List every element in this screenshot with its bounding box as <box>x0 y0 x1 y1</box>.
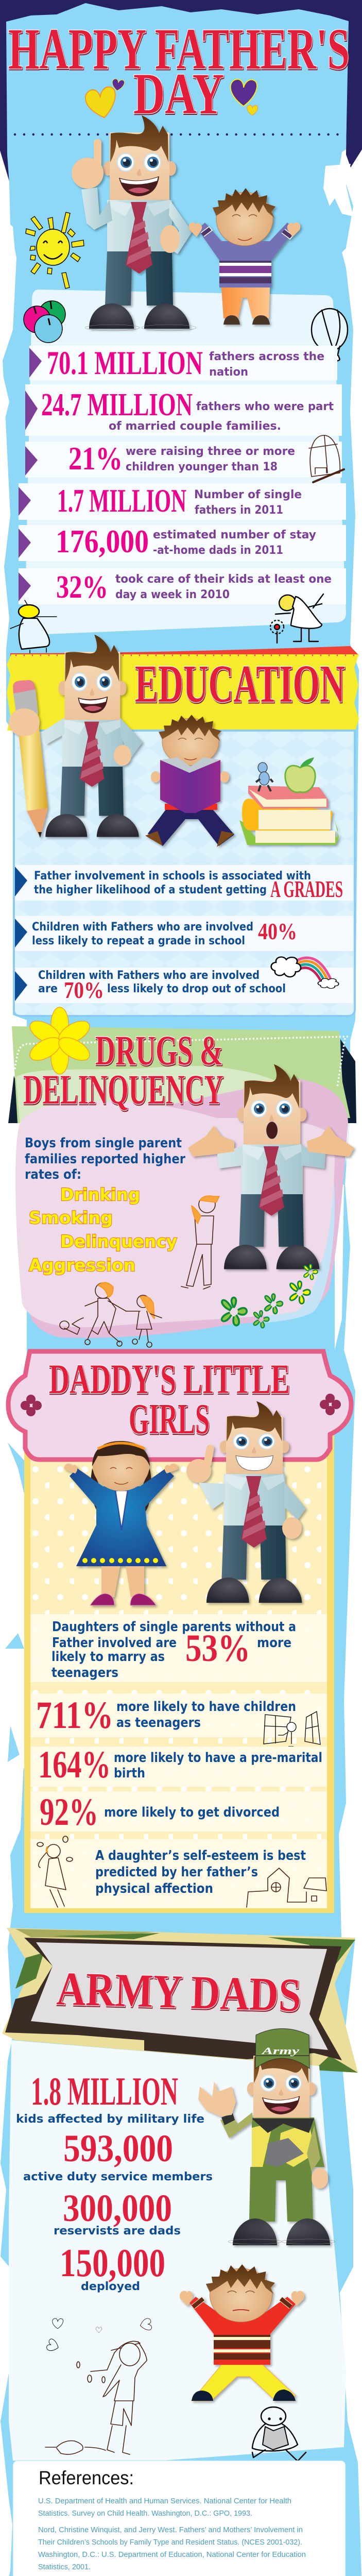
fact: 53 percent marry as teenagers: likely to marry as <box>51 1649 165 1665</box>
fact: 53 percent marry as teenagers: 53% <box>185 1627 250 1670</box>
stat row: 21 percent: 21% <box>68 440 123 477</box>
fact: 164 percent: more likely to have a pre-marital <box>114 1750 322 1766</box>
fact: 711 percent <box>30 1693 327 1737</box>
stat row: 21 percent <box>25 440 342 478</box>
stat row: 21 percent: children younger than 18 <box>126 461 278 473</box>
stat row: 24.7 million: 24.7 MILLION <box>41 387 193 422</box>
icon: yellow flower <box>26 1007 93 1074</box>
reference list: Nord, Christine Winquist, and Jerry West. Fathers’ and Mothers’ Involvement in <box>38 2526 303 2534</box>
panel: references <box>13 2461 346 2576</box>
character: father body <box>72 139 192 329</box>
icon: balls <box>24 301 65 343</box>
stat: 593,000 <box>23 2127 213 2183</box>
stat row: 21 percent: were raising three or more <box>126 445 295 458</box>
stat: 150,000: 150,000 <box>60 2241 165 2285</box>
reference list: Their Children’s Schools by Family Type and Resident Status. (NCES 2001-032). <box>38 2538 302 2547</box>
stat: 300,000: reservists are dads <box>54 2225 181 2238</box>
stat: 300,000: 300,000 <box>63 2187 172 2230</box>
doodle: children roller skating with cat <box>60 1282 162 1347</box>
panel: education <box>14 731 355 1016</box>
character: father thumbs up <box>186 1401 306 1603</box>
floor ellipses under soldier <box>228 2239 335 2244</box>
heading: army dads: ARMY DADS <box>56 1962 302 2022</box>
fact: 164 percent: birth <box>114 1766 145 1781</box>
fact: 92 percent <box>30 1791 327 1834</box>
list: higher rates: Delinquency <box>60 1231 177 1251</box>
education fact: 70 percent <box>15 968 353 1003</box>
fact: 711 percent: as teenagers <box>116 1715 201 1731</box>
reference list: Washington, D.C.: U.S. Department of Education, National Center for Education <box>38 2550 306 2559</box>
stat: 1.8 million: 1.8 MILLION <box>31 2069 178 2113</box>
stat row: 32 percent: day a week in 2010 <box>115 588 230 601</box>
fact: 53 percent marry as teenagers: Father involved are <box>52 1635 177 1651</box>
list: higher rates <box>29 1184 177 1275</box>
title: Day: DAY <box>133 62 224 126</box>
stat: 150,000: deployed <box>81 2280 140 2293</box>
text: boys from single parent families: families reported higher <box>25 1151 185 1167</box>
stat row: 176,000: -at-home dads in 2011 <box>153 544 283 557</box>
stat row: 70.1 million: nation <box>209 366 248 379</box>
icon: sun <box>26 212 84 289</box>
stat row: 176,000: estimated number of stay <box>153 529 316 541</box>
character: son reading <box>145 715 234 847</box>
stat row: 32 percent: took care of their kids at least one <box>115 573 332 586</box>
fact: self-esteem: A daughter’s self-esteem is best <box>95 1848 306 1863</box>
fact: 53 percent marry as teenagers <box>30 1614 327 1682</box>
character: daughter <box>64 1441 178 1605</box>
camouflage ribbon <box>2 1928 358 2073</box>
panel: drugs and delinquency <box>8 1026 356 1338</box>
stat row: 1.7 million: 1.7 MILLION <box>57 483 186 519</box>
icon: green apple <box>285 757 315 792</box>
character: father with pencil <box>9 635 143 838</box>
stat row: 1.7 million: Number of single <box>194 488 302 501</box>
grunge navy frame <box>0 0 362 181</box>
list: higher rates: Aggression <box>29 1255 135 1275</box>
education fact: 40 percent: Children with Fathers who are involved <box>32 921 253 934</box>
stat row: 24.7 million <box>25 384 342 436</box>
education fact: 40 percent <box>15 916 353 951</box>
text: boys from single parent families <box>25 1136 185 1182</box>
reference list: Statistics. Survey on Child Health. Washington, D.C.: GPO, 1993. <box>38 2509 252 2518</box>
fact: 53 percent marry as teenagers: Daughters of single parents without a <box>52 1619 296 1635</box>
heading: girls: GIRLS <box>129 1395 210 1443</box>
character: soldier father: Army <box>261 2046 300 2057</box>
education fact: A grades <box>15 865 353 902</box>
doodle: boy in coat <box>10 600 57 654</box>
stat: 1.8 million: kids affected by military life <box>16 2113 204 2126</box>
grey centre <box>31 1942 328 2050</box>
reference list: Statistics, 2001. <box>38 2563 91 2571</box>
education fact: 40 percent: 40% <box>258 918 297 944</box>
panel: army statistics background <box>9 2040 346 2461</box>
education fact: 70 percent: less likely to drop out of school <box>107 982 286 995</box>
character: father shrugging <box>188 1064 354 1269</box>
stat row: 176,000 <box>19 523 346 561</box>
dark ribbon <box>5 1938 342 2060</box>
stat: 593,000: 593,000 <box>63 2127 173 2170</box>
heading: delinquency: DELINQUENCY <box>23 1066 223 1113</box>
doodle: child with flower <box>270 592 323 643</box>
stat: 1.8 million <box>16 2069 204 2126</box>
list: higher rates: Smoking <box>29 1208 113 1228</box>
stat row: 24.7 million: of married couple families. <box>109 420 281 433</box>
stat: 593,000: active duty service members <box>23 2171 213 2183</box>
fact: self-esteem <box>30 1839 327 1908</box>
fact: 711 percent: 711% <box>36 1694 113 1737</box>
icon: hot air balloon <box>312 309 348 363</box>
fact: 53 percent marry as teenagers: teenagers <box>51 1665 118 1681</box>
icon: hearts <box>84 78 258 121</box>
list: higher rates: Drinking <box>60 1184 140 1205</box>
education fact: A grades: Father involvement in schools is associated with <box>34 870 311 883</box>
reference list: U.S. Department of Health and Human Services. National Center for Health <box>38 2497 291 2505</box>
doodle: child reading <box>252 2407 306 2461</box>
ribbon ends <box>8 1039 356 1123</box>
icon: teddy bear <box>256 762 273 791</box>
character: son cheering <box>189 188 300 325</box>
white grunge patches <box>0 164 362 1777</box>
doodle: girl with hearts <box>45 2318 152 2454</box>
character: soldier father <box>198 2029 330 2245</box>
dotted divider <box>15 133 340 135</box>
education fact: 70 percent: 70% <box>64 977 104 1003</box>
fact: 92 percent: 92% <box>40 1791 98 1834</box>
education fact: 70 percent: Children with Fathers who are involved <box>38 969 260 982</box>
banner: army dads <box>2 1928 358 2073</box>
stat row: 70.1 million: fathers across the <box>209 350 324 363</box>
doodle: thinking girl <box>37 1836 73 1907</box>
panel: daddy's little girls yellow frame <box>24 1432 334 1913</box>
head <box>103 115 176 200</box>
icon: window doodle <box>309 435 344 482</box>
icons: green flowers <box>222 1264 318 1328</box>
fact: self-esteem: predicted by her father’s <box>95 1865 258 1880</box>
icon: rainbow and clouds <box>271 957 339 989</box>
fact: 92 percent: more likely to get divorced <box>104 1805 280 1820</box>
stat row: 32 percent: 32% <box>56 570 108 605</box>
fact: 711 percent: more likely to have children <box>116 1699 296 1715</box>
panel: statistics background <box>25 290 346 635</box>
stat row: 1.7 million <box>19 483 346 520</box>
fact: 53 percent marry as teenagers: more <box>257 1635 291 1651</box>
floor ellipses <box>85 325 196 331</box>
doodle: houses <box>247 1868 326 1907</box>
doodle: girl at window <box>264 1711 320 1747</box>
education fact: A grades: the higher likelihood of a student getting <box>34 884 267 896</box>
text: boys from single parent families: Boys from single parent <box>25 1136 182 1151</box>
character: sad son <box>180 2264 304 2401</box>
stat row: 176,000: 176,000 <box>56 523 149 560</box>
character: father pointing up <box>103 115 176 200</box>
sign: daddy's little girls <box>8 1351 351 1460</box>
background blobs <box>30 1078 348 1338</box>
doodle: man with groceries <box>181 1196 219 1289</box>
stat row: 24.7 million: fathers who were part <box>196 400 334 413</box>
illustration: stack of books <box>239 786 339 845</box>
banner: education <box>7 646 359 731</box>
heading: drugs: DRUGS & <box>95 1027 223 1074</box>
education fact: 70 percent: are <box>38 982 58 995</box>
text: boys from single parent families: rates of: <box>25 1167 81 1182</box>
stat row: 1.7 million: fathers in 2011 <box>195 504 283 517</box>
fact: 164 percent: 164% <box>38 1743 111 1786</box>
stat row: 70.1 million: 70.1 MILLION <box>47 345 203 382</box>
stat row: 32 percent <box>19 568 346 605</box>
reference list <box>38 2497 329 2576</box>
heading: references: References: <box>39 2467 134 2488</box>
fact: self-esteem: physical affection <box>95 1881 213 1896</box>
education fact: 40 percent: less likely to repeat a grade in school <box>32 935 245 947</box>
fact: 164 percent <box>30 1743 327 1787</box>
